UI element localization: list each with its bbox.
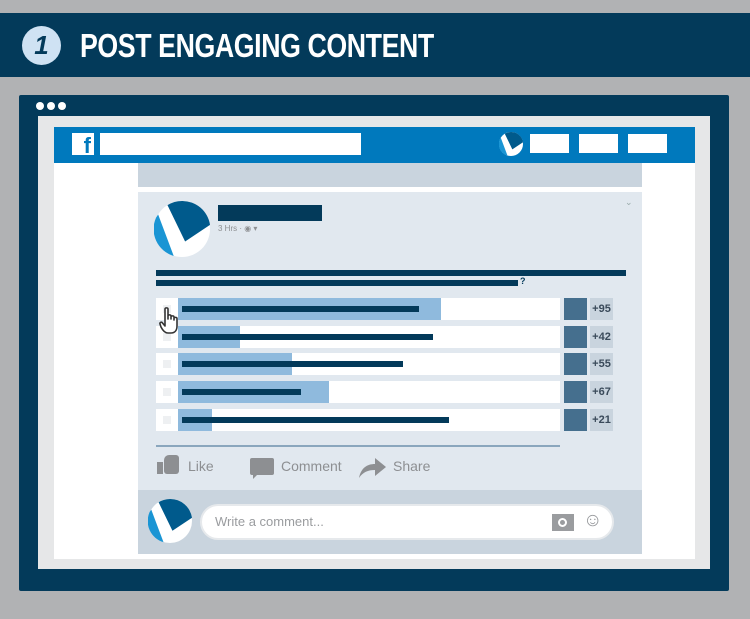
icon: hand cursor	[159, 307, 178, 334]
comment area	[138, 490, 642, 554]
icon: camera	[552, 514, 574, 531]
action: like: Like	[188, 458, 214, 474]
icon: number 1 badge	[22, 26, 61, 65]
name bar	[218, 205, 322, 221]
action: like	[157, 455, 214, 474]
option 2	[156, 326, 613, 348]
divider	[156, 445, 560, 447]
timestamp: 3 Hrs · ◉ ▾	[218, 224, 257, 233]
option 1	[156, 298, 613, 320]
option 5	[156, 409, 613, 431]
option 3: +55	[592, 358, 611, 370]
nav buttons	[530, 134, 569, 153]
screen	[38, 116, 710, 569]
option 3	[156, 353, 613, 375]
action: share: Share	[393, 458, 430, 474]
icon: smiley: ☺	[583, 510, 602, 531]
header band	[0, 13, 750, 77]
search box	[100, 133, 361, 155]
facebook nav bar	[54, 127, 695, 163]
top gray band	[138, 163, 642, 187]
action: comment	[250, 458, 342, 479]
chevron: ⌄	[625, 197, 633, 207]
icon: facebook f	[72, 133, 94, 155]
commenter avatar	[148, 499, 192, 543]
page white area	[54, 127, 695, 559]
option 4: +67	[592, 386, 611, 398]
title: POST ENGAGING CONTENT	[80, 27, 434, 64]
comment input: Write a comment...	[215, 514, 324, 529]
option 5: +21	[592, 414, 611, 426]
option 2: +42	[592, 331, 611, 343]
option 1: +95	[592, 303, 611, 315]
browser frame	[19, 95, 729, 591]
action: share	[359, 458, 430, 478]
option 4	[156, 381, 613, 403]
window dots	[36, 102, 66, 110]
poll options	[156, 298, 613, 431]
question text lines	[156, 270, 626, 286]
post card	[138, 192, 642, 490]
question text lines: ?	[520, 276, 526, 286]
icon: number 1 badge: 1	[34, 30, 49, 60]
icon: profile logo	[499, 132, 523, 156]
avatar	[154, 201, 210, 257]
comment input	[200, 504, 614, 540]
action: comment: Comment	[281, 458, 342, 474]
